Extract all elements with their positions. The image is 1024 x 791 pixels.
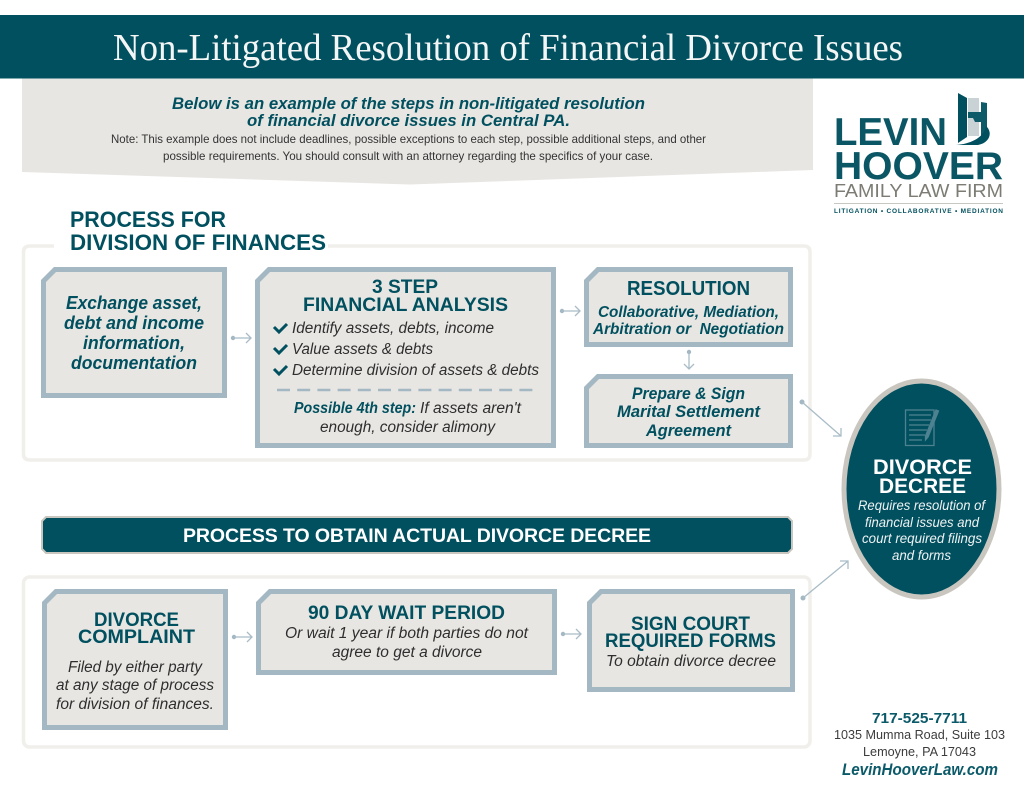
intro panel: of financial divorce issues in Central PA. (247, 112, 570, 130)
box: divorce complaint: at any stage of process (56, 677, 214, 694)
arrow: agreement to decree (800, 400, 841, 436)
box: exchange information: documentation (71, 353, 197, 373)
box: divorce complaint (44, 592, 226, 728)
heading: process for division of finances: DIVISION OF FINANCES (70, 230, 326, 255)
box: divorce complaint: for division of finances. (56, 696, 214, 713)
contact information: 717-525-7711 (872, 711, 967, 727)
logo: Levin Hoover Family Law Firm: HOOVER (834, 145, 1003, 188)
contact information (834, 711, 1005, 779)
contact information: Lemoyne, PA 17043 (863, 744, 976, 759)
box: 3 step financial analysis: Determine division of assets & debts (292, 362, 539, 379)
logo: Levin Hoover Family Law Firm: LEVIN (834, 111, 947, 154)
contact information: LevinHooverLaw.com (842, 761, 998, 779)
box: marital settlement agreement: Agreement (645, 422, 732, 440)
box: 90 day wait period: 90 DAY WAIT PERIOD (308, 602, 505, 624)
box: 3 step financial analysis: Value assets & debts (292, 341, 433, 358)
box: 3 step financial analysis (258, 270, 554, 446)
icon: document and pen (906, 410, 938, 446)
oval: divorce decree (844, 381, 999, 597)
box: marital settlement agreement (586, 376, 790, 446)
box: 90 day wait period (258, 592, 554, 672)
box: marital settlement agreement: Marital Settlement (617, 403, 762, 421)
icon: check marks (274, 324, 287, 374)
logo: Levin Hoover Family Law Firm: LITIGATION • COLLABORATIVE • MEDIATION (834, 208, 1003, 215)
box: 3 step financial analysis: Identify assets, debts, income (292, 320, 494, 337)
box: 90 day wait period: agree to get a divorce (332, 644, 482, 661)
arrow: wait period to forms (561, 629, 581, 639)
arrow: analysis to resolution (560, 306, 580, 316)
logo icon: building (956, 93, 990, 145)
box: exchange information: Exchange asset, (66, 293, 202, 313)
box: exchange information: debt and income (64, 313, 204, 333)
box: 3 step financial analysis: Possible 4th step: (294, 400, 416, 417)
box: exchange information (44, 270, 224, 396)
box: resolution: Collaborative, Mediation, (598, 304, 779, 321)
arrow: resolution to agreement (684, 350, 694, 369)
box: sign court required forms: REQUIRED FORMS (605, 630, 776, 652)
banner: process to obtain actual divorce decree (42, 517, 792, 553)
oval: divorce decree: and forms (892, 547, 951, 563)
box: exchange information: information, (83, 333, 185, 353)
intro panel: Note: This example does not include deadlines, possible exceptions to each step, possible additional steps, and other (111, 132, 706, 146)
box: 90 day wait period: Or wait 1 year if both parties do not (285, 625, 529, 642)
box: divorce complaint: Filed by either party (68, 659, 203, 676)
box: resolution: RESOLUTION (627, 278, 750, 300)
box: 3 step financial analysis: 3 STEP (372, 276, 438, 298)
oval: divorce decree: DECREE (879, 474, 966, 498)
heading: process for division of finances: PROCESS FOR (70, 207, 226, 232)
box: resolution (586, 270, 790, 344)
box: 3 step financial analysis: enough, consider alimony (320, 419, 496, 436)
intro panel: Below is an example of the steps in non-litigated resolution (172, 95, 645, 113)
box: 3 step financial analysis: If assets aren't (420, 400, 522, 417)
box: marital settlement agreement: Prepare & Sign (632, 385, 745, 403)
banner: process to obtain actual divorce decree: PROCESS TO OBTAIN ACTUAL DIVORCE DECREE (183, 525, 651, 547)
contact information: 1035 Mumma Road, Suite 103 (834, 727, 1005, 742)
panel: process to obtain divorce decree (24, 577, 810, 747)
logo: Levin Hoover Family Law Firm: FAMILY LAW FIRM (834, 180, 1003, 201)
title banner: Non-Litigated Resolution of Financial Divorce Issues (113, 27, 903, 69)
box: resolution: Arbitration or Negotiation (592, 321, 784, 338)
panel: process for division of finances (24, 207, 810, 460)
intro panel: possible requirements. You should consult with an attorney regarding the specifics of your case. (163, 149, 653, 163)
box: divorce complaint: COMPLAINT (78, 626, 195, 648)
oval: divorce decree: Requires resolution of (858, 497, 987, 513)
oval: divorce decree: DIVORCE (873, 455, 972, 479)
title banner (0, 15, 1024, 78)
arrow: complaint to wait period (232, 632, 252, 642)
logo: Levin Hoover Family Law Firm (834, 93, 1003, 215)
heading: process for division of finances (70, 207, 326, 255)
box: sign court required forms: SIGN COURT (631, 613, 750, 635)
arrow: exchange to analysis (231, 333, 251, 343)
box: 3 step financial analysis: FINANCIAL ANALYSIS (303, 294, 508, 316)
box: sign court required forms: To obtain divorce decree (606, 653, 776, 670)
oval: divorce decree: financial issues and (865, 514, 980, 530)
oval: divorce decree: court required filings (862, 530, 982, 546)
box: sign court required forms (590, 592, 792, 690)
box: divorce complaint: DIVORCE (94, 609, 179, 631)
arrow: forms to decree (800, 561, 848, 600)
intro panel (22, 78, 813, 184)
